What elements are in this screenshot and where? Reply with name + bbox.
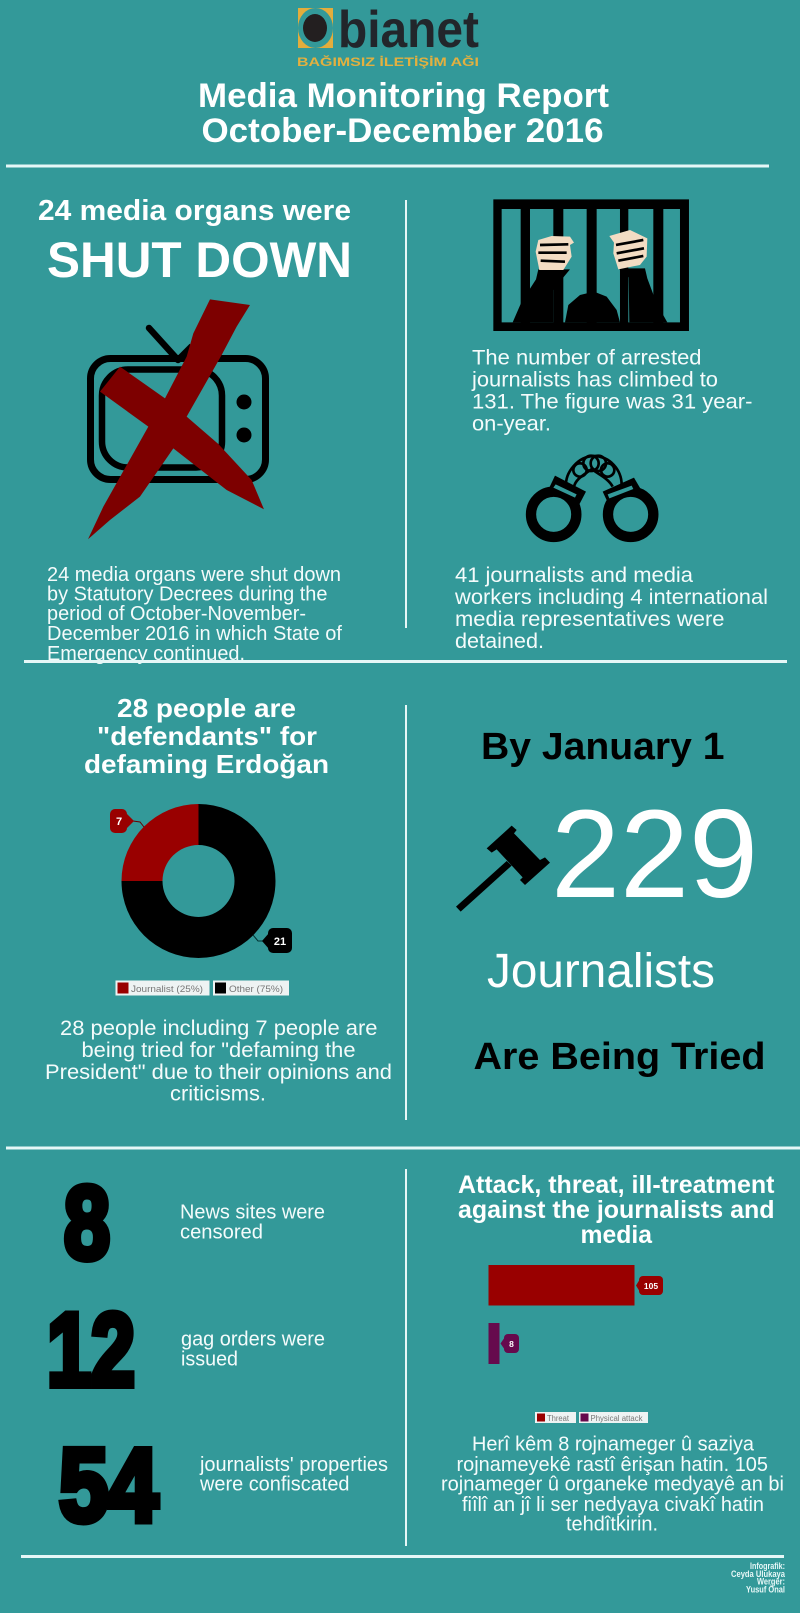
stat: 54 confiscated [59, 1428, 388, 1544]
stat: 12 gag orders: gag orders were [181, 1328, 325, 1350]
text: shut down description: period of October-November- [47, 603, 306, 625]
panel: journalists being tried [456, 726, 766, 1078]
text: kurdish paragraph: Herî kêm 8 rojnameger û saziya [472, 1434, 755, 1456]
legend: Journalist (25%) [131, 984, 203, 995]
text: detained journalists: detained. [455, 630, 544, 653]
data label: 7: 7 [116, 816, 122, 828]
text: defamation description: 28 people including 7 people are [60, 1017, 378, 1040]
stat: 8 news sites: News sites were [180, 1202, 325, 1224]
text: detained journalists [454, 564, 768, 653]
heading: 24 media organs: 24 media organs were [38, 195, 351, 227]
text: arrested journalists [471, 346, 752, 436]
credits [731, 1561, 786, 1596]
stat: 12 gag orders: issued [181, 1348, 238, 1370]
legend: Other (75%) [229, 984, 283, 995]
text: kurdish paragraph: fiîlî an jî li ser nedyaya civakî hatin [462, 1494, 764, 1516]
heading: defendants: 28 people are [117, 693, 296, 723]
stat: 54 confiscated: 54 [59, 1428, 158, 1544]
data label: 7 [110, 809, 144, 833]
text: detained journalists: workers including 4 international [454, 586, 768, 609]
panel: attacks and threats [441, 1171, 784, 1536]
title [198, 77, 609, 150]
stat: 54 confiscated: journalists' properties [199, 1454, 388, 1476]
legend: Threat [547, 1414, 570, 1423]
text: arrested journalists: The number of arrested [472, 346, 702, 370]
label: are being tried: Are Being Tried [474, 1036, 766, 1078]
stat: 12 gag orders: 12 [47, 1292, 135, 1408]
text: detained journalists: 41 journalists and media [455, 564, 693, 587]
icon: hands gripping jail bars [493, 199, 689, 331]
text: shut down description: by Statutory Decrees during the [47, 584, 328, 606]
heading: attack threat ill-treatment: media [580, 1221, 653, 1249]
stat: 8 news sites: censored [180, 1222, 263, 1244]
credits: Ceyda Ulukaya [731, 1569, 786, 1580]
text: kurdish paragraph: tehdîtkirin. [566, 1514, 658, 1536]
text: shut down description [47, 564, 342, 665]
data label: 21 [253, 928, 292, 953]
credits: Wergêr: [757, 1576, 785, 1588]
text: defamation description: President" due to their opinions and [45, 1061, 392, 1084]
heading: shut down: SHUT DOWN [47, 232, 352, 288]
panel: censorship figures [47, 1166, 388, 1544]
logo: bianet: BAĞIMSIZ İLETİŞİM AĞI [297, 54, 479, 69]
heading: attack threat ill-treatment: Attack, threat, ill-treatment [458, 1171, 775, 1199]
text: defamation description: criticisms. [170, 1082, 266, 1106]
logo: bianet [297, 1, 479, 69]
stat: 54 confiscated: were confiscated [199, 1474, 350, 1496]
logo: bianet: bianet [338, 1, 479, 59]
bar: threat 105 [488, 1265, 663, 1306]
text: shut down description: 24 media organs were shut down [47, 564, 341, 586]
heading: attack threat ill-treatment: against the journalists and [458, 1196, 774, 1224]
icon: crossed out television [88, 299, 266, 539]
label: journalists: Journalists [487, 945, 715, 998]
legend [535, 1412, 648, 1423]
heading: by january 1: By January 1 [481, 726, 724, 768]
panel: arrested journalists [454, 199, 768, 653]
legend: Physical attack [590, 1414, 643, 1423]
text: arrested journalists: on-year. [472, 412, 551, 436]
panel: defaming Erdogan defendants [45, 693, 392, 1106]
text: shut down description: Emergency continued. [47, 643, 245, 665]
donut chart [110, 804, 292, 996]
figure: 229: 229 [551, 785, 758, 924]
stat: 8 news sites [64, 1166, 325, 1282]
text: kurdish paragraph: rojnameger û organeke medyayê an bi [441, 1474, 784, 1496]
stat: 12 gag orders [47, 1292, 325, 1408]
panel: media organs shut down [38, 195, 352, 665]
credits: Infografik: [750, 1561, 785, 1572]
text: arrested journalists: 131. The figure was 31 year- [472, 390, 752, 414]
title: Media Monitoring Report [198, 77, 609, 115]
data label: 21: 21 [274, 936, 286, 948]
heading: defendants [84, 693, 329, 779]
legend [116, 980, 289, 996]
bar: physical attack 8: 8 [509, 1339, 514, 1349]
text: arrested journalists: journalists has climbed to [471, 368, 718, 392]
bar chart [488, 1265, 663, 1423]
text: shut down description: December 2016 in which State of [47, 623, 342, 645]
text: detained journalists: media representatives were [455, 608, 724, 631]
stat: 8 news sites: 8 [64, 1166, 110, 1282]
icon: handcuffs [531, 456, 653, 537]
title: October-December 2016 [202, 112, 604, 150]
text: kurdish paragraph [441, 1434, 784, 1536]
heading: attack threat ill-treatment [458, 1171, 775, 1249]
credits: Yusuf Önal [746, 1584, 785, 1596]
text: kurdish paragraph: rojnameyekê rastî êrişan hatin. 105 [456, 1454, 768, 1476]
heading: defendants: "defendants" for [97, 721, 317, 751]
icon: gavel [456, 826, 550, 912]
bar: physical attack 8 [488, 1323, 519, 1364]
text: defamation description [45, 1017, 392, 1106]
heading: defendants: defaming Erdoğan [84, 749, 329, 779]
bar: threat 105: 105 [644, 1281, 658, 1291]
text: defamation description: being tried for "defaming the [82, 1039, 356, 1062]
